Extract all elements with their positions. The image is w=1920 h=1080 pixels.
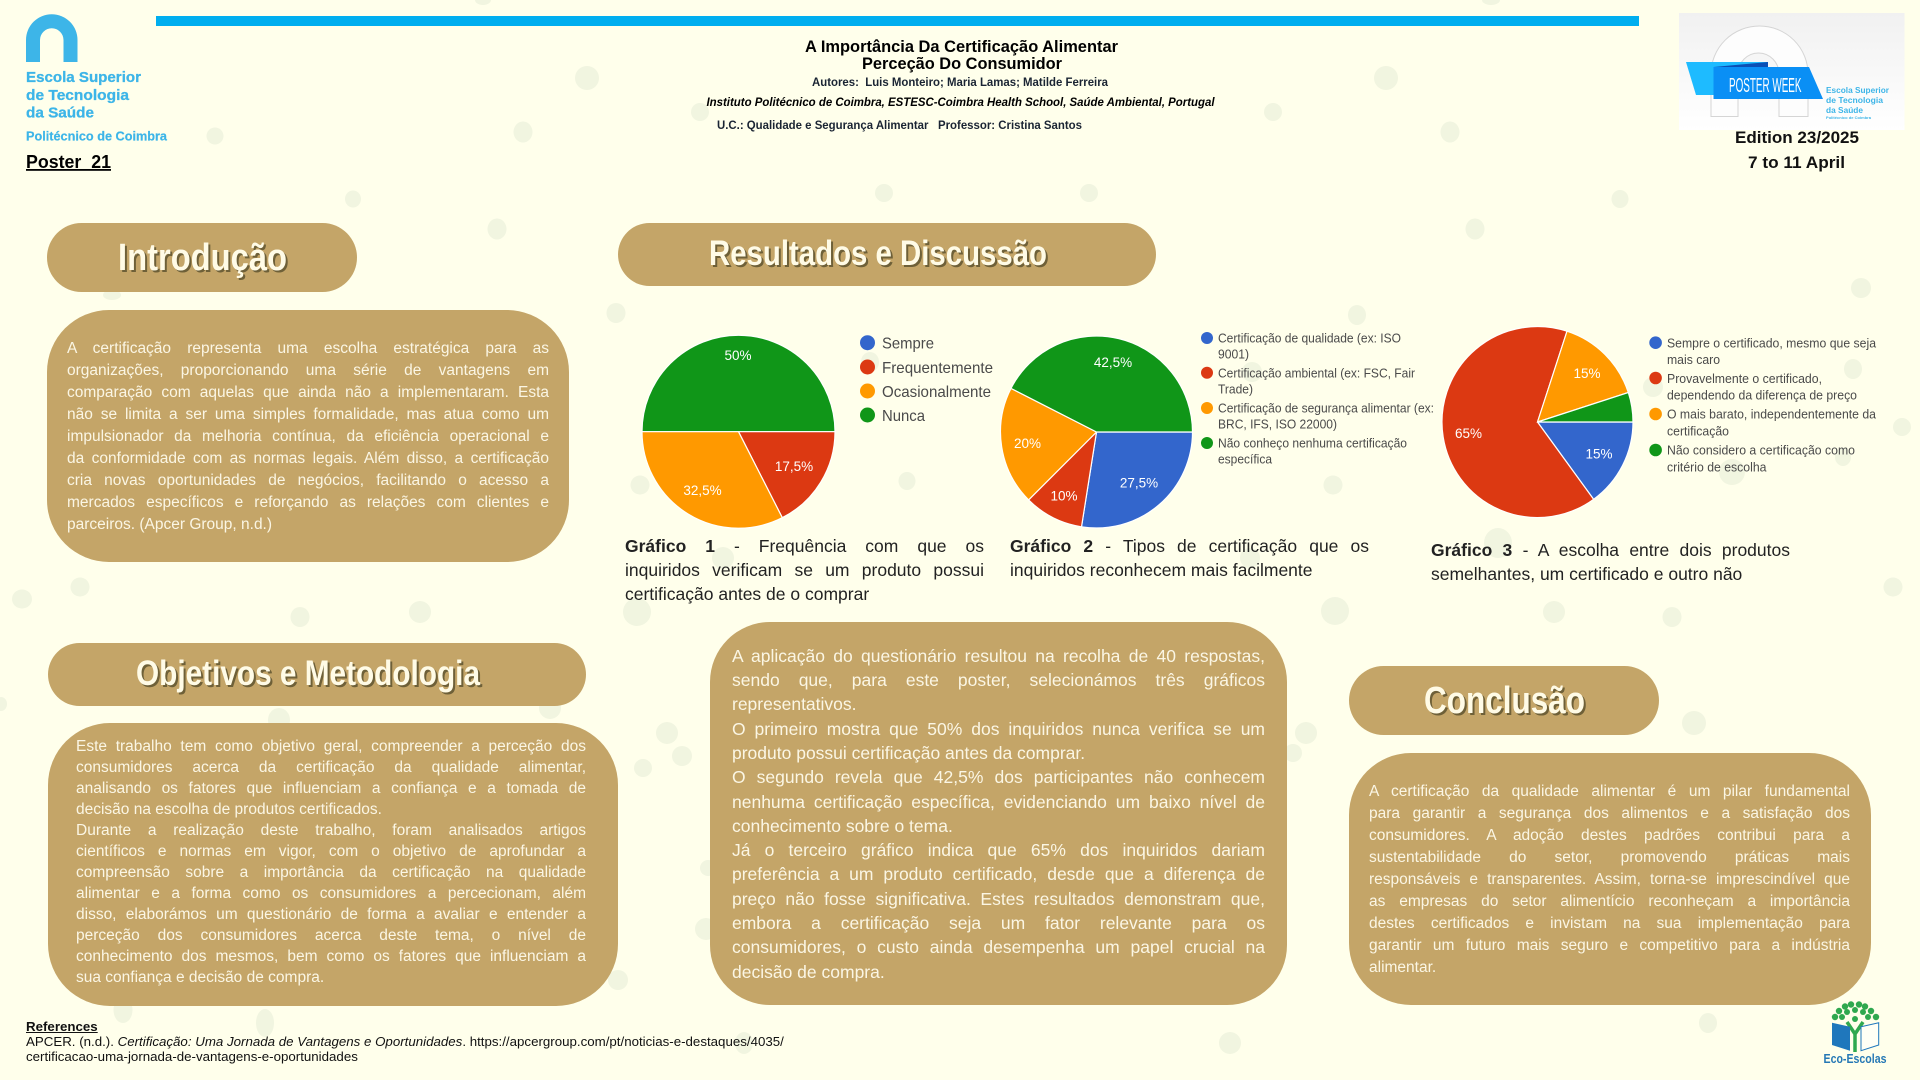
panel: conclusão text: destes certificados e invistam na sua implementação para xyxy=(1369,915,1850,932)
pie chart 3: 15% xyxy=(1573,366,1601,381)
legend: gráfico 3: Não considero a certificação como xyxy=(1667,442,1855,458)
heading: Resultados e Discussão xyxy=(618,223,1156,286)
legend: gráfico 2: Trade) xyxy=(1218,382,1253,396)
caption: gráfico 3 xyxy=(1431,540,1790,584)
heading: Resultados e Discussão: Resultados e Discussão xyxy=(709,234,1047,273)
panel: conclusão text xyxy=(1349,753,1871,1005)
top blue bar xyxy=(156,16,1639,26)
panel: discussão de resultados text: O primeiro mostra que 50% dos inquiridos nunca verifica se um xyxy=(732,719,1265,739)
panel: discussão de resultados text: preço não fosse significativa. Estes resultados demonstram que, xyxy=(732,889,1265,909)
panel: discussão de resultados text: embora a certificação seja um fator relevante para os xyxy=(732,913,1265,933)
caption: gráfico 2: inquiridos reconhecem mais facilmente xyxy=(1010,560,1312,580)
panel: introdução text: organizações, proporcionando uma série de vantagens em xyxy=(67,362,549,379)
caption: gráfico 1: inquiridos verificam se um produto possui xyxy=(625,560,984,580)
panel: objetivos e metodologia text: decisão na escolha de produtos certificados. xyxy=(76,800,382,818)
panel: discussão de resultados text: preferência a um produto certificado, desde que a diferença de xyxy=(732,864,1265,884)
references: APCER. (n.d.). Certificação: Uma Jornada de Vantagens e Oportunidades. https://apcergroup.com/pt/noticias-e-destaques/4035/ xyxy=(26,1034,784,1049)
title block: Instituto Politécnico de Coimbra, ESTESC-Coimbra Health School, Saúde Ambiental, Portugal xyxy=(706,97,1215,109)
panel: objetivos e metodologia text: conhecimento dos mesmos, bem como os fatores que influenciam a xyxy=(76,948,586,964)
logo: poster week: POSTER WEEK xyxy=(1729,75,1802,97)
panel: objetivos e metodologia text: disso, elaborámos um questionário de forma a avaliar e entender a xyxy=(76,906,586,922)
panel: objetivos e metodologia text: compreensão sobre a importância da certificação na qualidade xyxy=(76,864,586,880)
heading: Conclusão xyxy=(1349,666,1659,735)
panel: discussão de resultados text: produto possui certificação antes da comprar. xyxy=(732,743,1085,763)
poster number: Poster 21 xyxy=(26,152,111,172)
panel: discussão de resultados text xyxy=(710,622,1287,1005)
pie chart 1: 50% xyxy=(724,348,752,363)
heading: Conclusão: Conclusão xyxy=(1424,680,1585,722)
panel: introdução text: não se limita a ser uma simples formalidade, mas atua como um xyxy=(67,406,549,423)
legend: gráfico 2: BRC, IFS, ISO 22000) xyxy=(1218,418,1337,432)
legend: gráfico 2: Certificação de qualidade (ex: ISO xyxy=(1218,332,1401,346)
legend: gráfico 1 xyxy=(860,335,993,425)
panel: objetivos e metodologia text: consumidores acerca da certificação da qualidade alimentar, xyxy=(76,758,586,776)
pie chart 3: 15% xyxy=(1585,446,1613,462)
panel: objetivos e metodologia text: perceção dos consumidores acerca deste tema, o nível de xyxy=(76,926,586,944)
panel: introdução text: da conformidade com as normas legais. Além disso, a certificação xyxy=(67,450,549,467)
logo: Eco-Escolas xyxy=(1824,1001,1886,1066)
pie chart 2: 10% xyxy=(1050,488,1078,504)
legend: gráfico 2: Certificação ambiental (ex: FSC, Fair xyxy=(1218,366,1415,380)
panel: objetivos e metodologia text: analisando os fatores que influenciam a confiança e a tomada de xyxy=(76,780,586,796)
legend: gráfico 3: dependendo da diferença de preço xyxy=(1667,388,1857,402)
logo: Escola Superior de Tecnologia da Saúde: Politécnico de Coimbra xyxy=(26,128,168,144)
heading: Introdução: Introdução xyxy=(118,237,287,279)
icon: arch xyxy=(26,14,78,62)
panel: objetivos e metodologia text: sua confiança e decisão de compra. xyxy=(76,968,324,986)
panel: conclusão text: alimentar. xyxy=(1369,959,1436,976)
legend: gráfico 1: Nunca xyxy=(882,408,925,425)
panel: introdução text: A certificação representa uma escolha estratégica para as xyxy=(67,340,549,357)
edition: Edition 23/2025 xyxy=(1735,128,1859,147)
logo: poster week: de Tecnologia xyxy=(1826,95,1883,105)
legend: gráfico 2 xyxy=(1201,332,1434,466)
caption: gráfico 1 xyxy=(625,536,984,604)
pie chart 1 xyxy=(642,335,835,528)
pie chart 2 xyxy=(1001,336,1192,528)
legend: gráfico 3: Provavelmente o certificado, xyxy=(1667,371,1822,386)
panel: discussão de resultados text: decisão de compra. xyxy=(732,962,885,982)
panel: objetivos e metodologia text: Este trabalho tem como objetivo geral, compreender a perceção dos xyxy=(76,738,586,754)
logo: poster week: da Saúde xyxy=(1826,105,1863,115)
caption: gráfico 1: Gráfico 1 - Frequência com que os xyxy=(625,536,984,556)
legend: gráfico 2: Certificação de segurança alimentar (ex: xyxy=(1218,402,1434,416)
logo: poster week xyxy=(1679,13,1904,130)
panel: introdução text: impulsionador da melhoria contínua, da eficiência operacional e xyxy=(67,428,549,445)
panel: conclusão text: sustentabilidade do setor, promovendo práticas mais xyxy=(1369,849,1850,866)
legend: gráfico 2: Não conheço nenhuma certificação xyxy=(1218,436,1407,450)
caption: gráfico 3: Gráfico 3 - A escolha entre dois produtos xyxy=(1431,540,1790,560)
logo: Eco-Escolas: Eco-Escolas xyxy=(1824,1051,1886,1066)
title block: Perceção Do Consumidor xyxy=(862,55,1063,73)
panel: introdução text xyxy=(47,310,569,562)
legend: gráfico 3 xyxy=(1649,336,1877,474)
title block: A Importância Da Certificação Alimentar xyxy=(805,38,1119,56)
panel: discussão de resultados text: conhecimento sobre o tema. xyxy=(732,816,953,836)
panel: conclusão text: A certificação da qualidade alimentar é um pilar fundamental xyxy=(1369,783,1850,800)
panel: conclusão text: garantir um futuro mais seguro e competitivo para a indústria xyxy=(1369,937,1850,954)
pie chart 2: 27,5% xyxy=(1120,476,1158,490)
legend: gráfico 3: O mais barato, independentemente da xyxy=(1667,406,1877,422)
references: References xyxy=(26,1019,98,1034)
caption: gráfico 3: semelhantes, um certificado e outro não xyxy=(1431,564,1742,584)
panel: discussão de resultados text: sendo que, para este poster, selecionámos três gráficos xyxy=(732,670,1265,690)
pie chart 1: 32,5% xyxy=(683,483,722,498)
legend: gráfico 1: Sempre xyxy=(882,336,934,352)
panel: discussão de resultados text: consumidores, o custo ainda desempenha um papel crucial na xyxy=(732,937,1265,957)
legend: gráfico 3: critério de escolha xyxy=(1667,460,1767,474)
panel: objetivos e metodologia text xyxy=(48,723,618,1006)
legend: gráfico 2: 9001) xyxy=(1218,348,1249,362)
panel: conclusão text: para garantir a segurança dos alimentos e a satisfação dos xyxy=(1369,805,1850,822)
panel: introdução text: parceiros. (Apcer Group, n.d.) xyxy=(67,516,272,533)
pie chart 1: 17,5% xyxy=(775,459,813,474)
references: certificacao-uma-jornada-de-vantagens-e-oportunidades xyxy=(26,1049,358,1064)
heading: Objetivos e Metodologia xyxy=(48,643,586,706)
panel: conclusão text: consumidores. A adoção destes padrões contribui para a xyxy=(1369,827,1850,844)
legend: gráfico 2: específica xyxy=(1218,452,1272,466)
panel: introdução text: comparação com aquelas que ainda não a implementaram. Esta xyxy=(67,384,549,401)
logo: Escola Superior de Tecnologia da Saúde: de Tecnologia xyxy=(26,87,130,104)
legend: gráfico 3: certificação xyxy=(1667,424,1729,438)
heading: Introdução xyxy=(47,223,357,292)
title block: U.C.: Qualidade e Segurança Alimentar Professor: Cristina Santos xyxy=(717,120,1082,132)
logo: poster week: Escola Superior xyxy=(1826,85,1890,95)
panel: conclusão text: responsáveis e transparentes. Assim, torna-se imprescindível que xyxy=(1369,871,1850,888)
heading: Objetivos e Metodologia: Objetivos e Metodologia xyxy=(136,654,480,693)
panel: objetivos e metodologia text: alimentar e a forma como os consumidores a percecionam, além xyxy=(76,884,586,902)
panel: discussão de resultados text: representativos. xyxy=(732,694,857,714)
legend: gráfico 1: Ocasionalmente xyxy=(882,384,991,401)
panel: introdução text: mercados específicos e reforçando as relações com clientes e xyxy=(67,494,549,511)
pie chart 3: 65% xyxy=(1455,426,1482,441)
logo: poster week: Politécnico de Coimbra xyxy=(1826,115,1872,120)
panel: introdução text: cria novas oportunidades de negócios, facilitando o acesso a xyxy=(67,472,549,489)
panel: discussão de resultados text: nenhuma certificação específica, evidenciando um baixo nível de xyxy=(732,792,1265,812)
pie chart 2: 20% xyxy=(1014,436,1041,451)
pie chart 3 xyxy=(1442,327,1633,518)
logo: Escola Superior de Tecnologia da Saúde: Escola Superior xyxy=(26,69,141,86)
title block xyxy=(706,38,1215,132)
panel: objetivos e metodologia text: Durante a realização deste trabalho, foram analisados artigos xyxy=(76,822,586,838)
panel: conclusão text: as empresas do setor alimentício reconheçam a importância xyxy=(1369,893,1850,910)
panel: discussão de resultados text: Já o terceiro gráfico indica que 65% dos inquiridos dariam xyxy=(732,840,1265,860)
edition xyxy=(1735,128,1859,172)
logo: Escola Superior de Tecnologia da Saúde xyxy=(26,14,168,144)
caption: gráfico 2 xyxy=(1010,536,1369,580)
caption: gráfico 2: Gráfico 2 - Tipos de certificação que os xyxy=(1010,536,1369,556)
legend: gráfico 1: Frequentemente xyxy=(882,360,993,377)
edition: 7 to 11 April xyxy=(1748,153,1845,172)
panel: discussão de resultados text: O segundo revela que 42,5% dos participantes não conhecem xyxy=(732,767,1265,787)
panel: discussão de resultados text: A aplicação do questionário resultou na recolha de 40 respostas, xyxy=(732,646,1265,666)
legend: gráfico 3: mais caro xyxy=(1667,352,1720,367)
caption: gráfico 1: certificação antes de o comprar xyxy=(625,584,869,604)
panel: objetivos e metodologia text: científicos e normas em vigor, com o objetivo de aprofundar a xyxy=(76,842,586,860)
legend: gráfico 3: Sempre o certificado, mesmo que seja xyxy=(1667,336,1877,350)
title block: Autores: Luis Monteiro; Maria Lamas; Matilde Ferreira xyxy=(812,77,1109,89)
references xyxy=(26,1019,784,1064)
pie chart 2: 42,5% xyxy=(1094,355,1132,370)
logo: Escola Superior de Tecnologia da Saúde: da Saúde xyxy=(26,104,94,122)
